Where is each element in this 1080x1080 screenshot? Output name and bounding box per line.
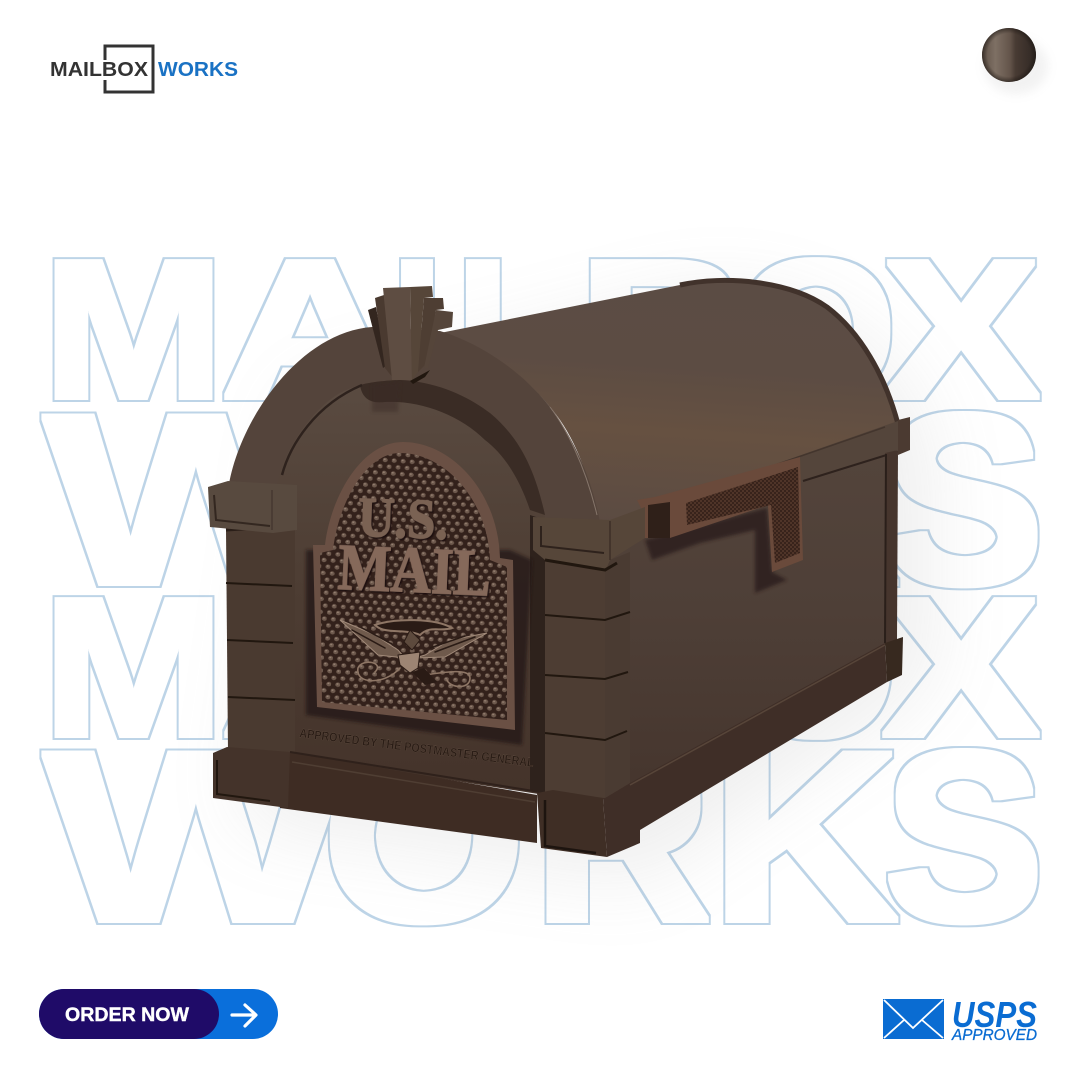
left pillar blocks	[226, 526, 295, 755]
arch highlight edge	[550, 407, 597, 515]
background word: MAILBOX row 3: M	[43, 558, 224, 777]
keystone shadow	[372, 382, 400, 412]
background word: MAILBOX row 1: I	[392, 220, 442, 439]
left cap block	[208, 481, 297, 533]
background word: WORKS row 2: W	[44, 365, 349, 635]
background word: WORKS row 4	[44, 702, 1044, 972]
side panel	[600, 422, 892, 800]
background word: MAILBOX row 3	[43, 558, 1039, 777]
arch inner shadow	[360, 380, 545, 515]
rear top cap	[898, 417, 910, 455]
plate frame	[313, 442, 515, 730]
arch front ring	[228, 327, 600, 528]
soft shadow behind mailbox	[240, 297, 930, 880]
usps wordmark: USPS	[952, 994, 1037, 1035]
background word: WORKS row 2: S	[884, 365, 1044, 635]
us mail plate	[313, 442, 515, 730]
side top band	[610, 421, 898, 542]
background word: MAILBOX row 1: B	[578, 220, 748, 439]
mail flag	[637, 457, 803, 572]
side flag shadow	[645, 508, 787, 593]
keystone fan ornament	[368, 286, 453, 384]
rear base cap	[885, 637, 903, 682]
background word: MAILBOX row 3: A	[221, 558, 399, 777]
background word: MAILBOX row 1: O	[736, 220, 896, 439]
order now button	[39, 989, 278, 1039]
background word: WORKS row 2: K	[711, 365, 898, 635]
background word: MAILBOX row 3: I	[392, 558, 442, 777]
rear edge trim	[885, 450, 898, 645]
background word: MAILBOX row 1: M	[43, 220, 224, 439]
background word: MAILBOX row 3: L	[456, 558, 574, 777]
logo text mailbox: MAILBOX	[50, 58, 148, 81]
roof	[440, 280, 898, 524]
mailbox product illustration	[208, 280, 910, 857]
logo box	[105, 46, 153, 92]
plate lettering: U.S.	[357, 487, 449, 552]
background word: WORKS row 4: S	[884, 702, 1044, 972]
background word: MAILBOX row 1: L	[456, 220, 574, 439]
roof rim	[680, 280, 898, 424]
background word: WORKS row 2: O	[322, 365, 526, 635]
arrow icon	[232, 1005, 256, 1026]
eagle emblem	[340, 620, 487, 686]
background word: WORKS row 4: K	[711, 702, 898, 972]
background word: WORKS row 4: W	[44, 702, 349, 972]
right cap block	[533, 507, 645, 572]
background word: MAILBOX row 3: B	[578, 558, 748, 777]
button label: ORDER NOW	[65, 1005, 189, 1026]
background word: WORKS row 2: R	[533, 365, 711, 635]
plate field	[320, 453, 507, 720]
background word: MAILBOX row 3: X	[883, 558, 1039, 777]
background word: MAILBOX row 3: O	[736, 558, 896, 777]
background word: WORKS row 4: O	[322, 702, 526, 972]
background word: MAILBOX row 1	[43, 220, 1039, 439]
usps approved badge	[883, 994, 1037, 1044]
background word: MAILBOX row 1: X	[883, 220, 1039, 439]
background word: MAILBOX row 1: A	[221, 220, 399, 439]
plate shadow	[306, 550, 532, 745]
logo text works: WORKS	[158, 58, 238, 81]
colour swatch: bronze	[982, 28, 1048, 94]
envelope icon	[883, 999, 944, 1039]
background word: WORKS row 4: R	[533, 702, 711, 972]
background word: WORKS row 2	[44, 365, 1044, 635]
logo: mailbox works	[50, 46, 238, 92]
base plinth	[213, 747, 607, 857]
front panel	[277, 380, 545, 795]
right pillar front blocks	[530, 515, 630, 798]
left base block	[213, 747, 290, 808]
approved by postmaster text: APPROVED BY THE POSTMASTER GENERAL	[299, 726, 535, 770]
plate lettering second line: MAIL	[336, 531, 492, 610]
side base	[603, 643, 887, 857]
approved wordmark: APPROVED	[951, 1027, 1037, 1044]
right base block	[537, 790, 607, 857]
